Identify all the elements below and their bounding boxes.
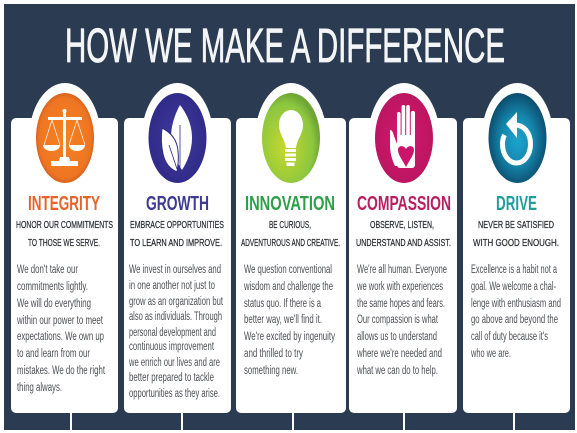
body text: integrity: to and learn from our xyxy=(17,348,90,360)
body text: innovation: better way, we'll find it. xyxy=(244,314,322,326)
panel: drive xyxy=(463,83,570,431)
body text: integrity: We don't take our xyxy=(17,264,78,276)
body text: growth: better prepared to tackle xyxy=(129,372,214,384)
subheading: innovation: BE CURIOUS, xyxy=(269,219,311,231)
body text: innovation: We question conventional xyxy=(244,264,332,276)
body text: innovation: wisdom and challenge the xyxy=(243,281,333,293)
body text: growth: continuous improvement xyxy=(129,341,215,353)
body text: integrity: mistakes. We do the right xyxy=(17,365,106,377)
icon: scales xyxy=(36,93,94,183)
subheading: drive xyxy=(473,219,559,249)
body text: compassion: Our compassion is what xyxy=(357,314,439,326)
icon: light bulb xyxy=(262,93,320,183)
subheading: integrity: TO THOSE WE SERVE. xyxy=(28,237,100,249)
body text: integrity: thing always. xyxy=(17,382,62,394)
body text: growth: grow as an organization but xyxy=(129,296,224,308)
subheading: integrity xyxy=(16,219,113,249)
subheading: innovation: ADVENTUROUS AND CREATIVE. xyxy=(241,237,340,249)
body text: growth xyxy=(128,264,224,400)
body text: growth: We invest in ourselves and xyxy=(129,264,221,276)
subheading: compassion: OBSERVE, LISTEN, xyxy=(370,219,434,231)
subheading: growth: TO LEARN AND IMPROVE. xyxy=(130,237,222,249)
panel: innovation xyxy=(236,83,346,431)
panel: growth xyxy=(124,83,231,431)
body text: innovation: and thrilled to try xyxy=(244,348,303,360)
icon: leaves xyxy=(148,93,206,183)
subheading: compassion: UNDERSTAND AND ASSIST. xyxy=(356,237,451,249)
body text: drive xyxy=(470,264,561,360)
heading: drive: DRIVE xyxy=(496,192,537,215)
body text: integrity: expectations. We own up xyxy=(17,331,104,343)
body text: innovation: We're excited by ingenuity xyxy=(244,331,335,343)
subheading: growth xyxy=(130,219,224,249)
body text: compassion: We're all human. Everyone xyxy=(357,264,447,276)
body text: compassion: what we can do to help. xyxy=(356,365,438,377)
heading: compassion: COMPASSION xyxy=(357,192,451,215)
body text: compassion: we work with experiences xyxy=(356,281,443,293)
body text: growth: personal development and xyxy=(129,327,216,339)
subheading: integrity: HONOR OUR COMMITMENTS xyxy=(16,219,113,231)
subheading: compassion xyxy=(356,219,451,249)
body text: innovation: something new. xyxy=(244,365,298,377)
body text: growth: also as individuals. Through xyxy=(129,311,222,323)
subheading: growth: EMBRACE OPPORTUNITIES xyxy=(130,219,224,231)
body text: compassion: the same hopes and fears. xyxy=(357,298,445,310)
body text: drive: who we are. xyxy=(470,348,511,360)
icon: circular arrow xyxy=(488,93,546,183)
icon: hand with heart xyxy=(375,93,433,183)
heading: innovation: INNOVATION xyxy=(245,192,335,215)
body text: growth: opportunities as they arise. xyxy=(129,388,220,400)
heading: growth: GROWTH xyxy=(146,192,209,215)
subheading: innovation xyxy=(241,219,340,249)
panel: integrity xyxy=(11,83,118,431)
body text: compassion: where we're needed and xyxy=(356,348,442,360)
body text: compassion: allows us to understand xyxy=(357,331,437,343)
body text: growth: we enrich our lives and are xyxy=(128,357,220,369)
body text: integrity xyxy=(16,264,106,394)
body text: innovation xyxy=(243,264,335,377)
heading: integrity: INTEGRITY xyxy=(28,192,100,215)
body text: integrity: within our power to meet xyxy=(16,315,104,327)
body text: growth: in one another not just to xyxy=(129,280,215,292)
body text: integrity: commitments lightly. xyxy=(17,281,88,293)
body text: innovation: status quo. If there is a xyxy=(244,298,321,310)
panel: compassion xyxy=(349,83,457,431)
body text: integrity: We will do everything xyxy=(17,298,91,310)
body text: compassion xyxy=(356,264,447,377)
